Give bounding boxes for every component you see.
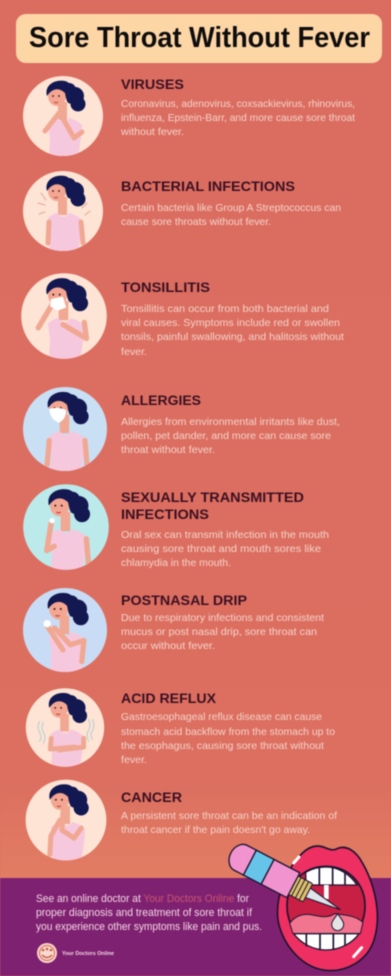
panel: cancer [26,780,337,862]
text: viruses: Coronavirus, adenovirus, coxsackievirus, rhinovirus, [121,99,355,110]
text: viruses: without fever. [120,127,184,138]
panel: viruses [23,76,355,158]
logo text: Your Doctors Online [62,951,114,957]
text: allergies: throat without fever. [121,445,215,456]
text: acid reflux [121,712,335,766]
text: cancer [121,811,337,836]
heading: tonsillitis: TONSILLITIS [121,280,210,295]
icon: woman coughing [23,171,103,253]
text: call to action: you experience other symptoms like pain and pus. [36,921,262,933]
text: bacterial infections: cause sore throats without fever. [121,217,271,228]
uvula [324,885,329,899]
dropper [225,840,347,922]
panel: postnasal drip [23,588,324,674]
text: postnasal drip: mucus or post nasal drip, sore throat can [121,627,317,638]
text: viruses: influenza, Epstein-Barr, and more cause sore throat [121,113,355,124]
text: cancer: A persistent sore throat can be an indication of [121,811,337,822]
icon: woman with tissue [21,273,107,361]
heading: viruses: VIRUSES [121,77,184,92]
text: call to action: proper diagnosis and treatment of sore throat if [36,907,253,919]
drop [332,914,344,931]
text: sexually transmitted infections: causing sore throat and mouth sores like [121,544,321,555]
text: postnasal drip [121,613,324,652]
panel: acid reflux [26,688,335,769]
heading: sexually transmitted infections: INFECTIONS [121,507,209,522]
text: bacterial infections [121,203,341,228]
text: postnasal drip: Due to respiratory infections and consistent [121,613,324,624]
text: acid reflux: stomach acid backflow from the stomach up to [121,727,335,738]
icon: woman holding pill [23,484,109,572]
text: acid reflux: Gastroesophageal reflux disease can cause [121,712,322,723]
title banner: Sore Throat Without Fever [29,22,370,54]
lip highlights [294,857,362,957]
text: postnasal drip: occur without fever. [121,641,215,652]
text: sexually transmitted infections: chlamydia in the mouth. [121,558,231,569]
panel: allergies [23,387,340,473]
lips [278,846,377,971]
heading: sexually transmitted infections [121,490,304,522]
text: sexually transmitted infections [121,530,329,569]
icon: logo [37,943,57,963]
icon: woman holding tissue [23,588,107,674]
panel: tonsillitis [21,273,344,361]
text: tonsillitis [121,304,344,358]
heading: sexually transmitted infections: SEXUALLY TRANSMITTED [121,490,304,505]
text: allergies [121,417,340,456]
footer panel [0,878,391,976]
text: sexually transmitted infections: Oral sex can transmit infection in the mouth [121,530,329,541]
text: acid reflux: the esophagus, causing sore throat without [121,741,324,752]
panel: bacterial infections [23,171,341,253]
text: allergies: pollen, pet dander, and more can cause sore [121,431,331,442]
text: acid reflux: fever. [121,755,147,766]
mouth interior [287,866,365,946]
heading: bacterial infections: BACTERIAL INFECTIONS [121,179,295,194]
text: cancer: throat cancer if the pain doesn't go away. [121,825,310,836]
text: tonsillitis: tonsils, painful swallowing, and halitosis without [121,332,344,343]
text: tonsillitis: Tonsillitis can occur from both bacterial and [121,304,329,315]
text: call to action [36,893,262,933]
text: call to action: See an online doctor at Your Doctors Online for [36,893,249,905]
icon: woman holding stomach [26,688,104,769]
heading: acid reflux: ACID REFLUX [121,691,216,706]
title banner [16,14,382,63]
icon: woman holding throat [23,76,103,158]
text: tonsillitis: viral causes. Symptoms include red or swollen [121,318,340,329]
illustration: mouth and dropper [225,840,377,971]
text: bacterial infections: Certain bacteria like Group A Streptococcus can [121,203,341,214]
lower teeth [294,934,359,950]
icon: woman with hand at mouth [26,780,106,862]
text: allergies: Allergies from environmental irritants like dust, [121,417,340,428]
text: viruses [120,99,355,138]
panel: sexually transmitted infections [23,484,329,572]
icon: woman wearing mask [23,387,107,473]
heading: postnasal drip: POSTNASAL DRIP [121,593,247,608]
tongue [290,914,363,934]
upper teeth [306,867,357,885]
text: tonsillitis: fever. [121,347,147,358]
heading: allergies: ALLERGIES [121,393,201,408]
heading: cancer: CANCER [121,790,182,805]
